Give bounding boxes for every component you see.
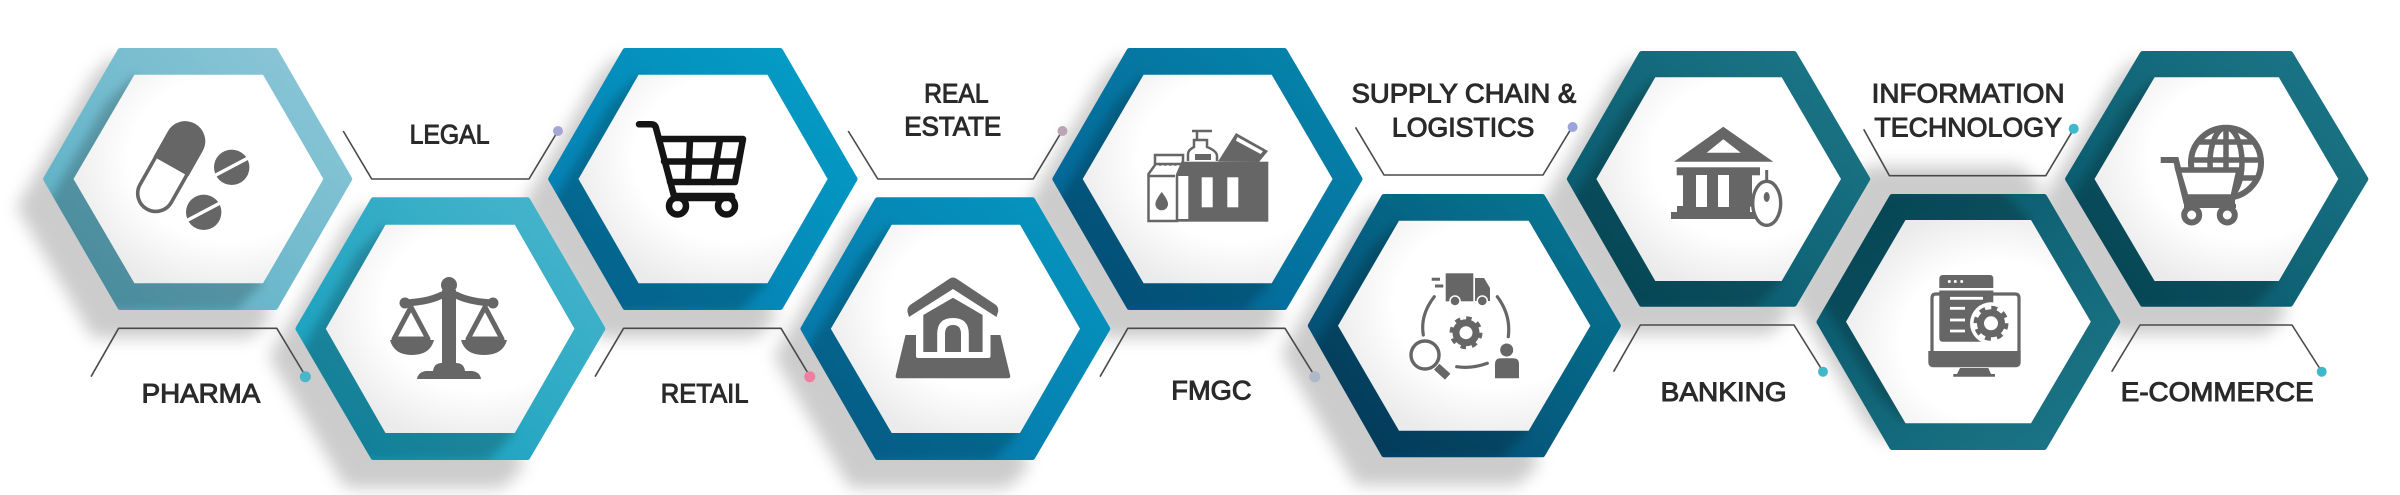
label: retail: RETAIL xyxy=(661,379,748,409)
label: e-commerce xyxy=(2112,325,2327,407)
label: supply chain and logistics xyxy=(1352,78,1578,175)
label: information technology xyxy=(1864,78,2079,176)
icon: capsule and tablets xyxy=(129,114,250,230)
hexagon: banking xyxy=(1568,54,1867,309)
icon: monitor with settings window xyxy=(1928,275,2021,377)
label: supply chain and logistics: SUPPLY CHAIN & xyxy=(1352,78,1576,108)
icon: scales of justice xyxy=(390,277,507,379)
hexagon: legal xyxy=(298,200,602,461)
label: real estate: REAL xyxy=(924,78,989,108)
label: fmgc xyxy=(1100,328,1320,405)
icon: logistics cycle xyxy=(1411,273,1519,378)
icon: cart with globe xyxy=(2161,128,2261,222)
hexagon: e-commerce xyxy=(2066,54,2365,309)
label: real estate xyxy=(848,78,1068,179)
label: information technology: INFORMATION xyxy=(1872,78,2065,108)
label: pharma: PHARMA xyxy=(142,379,260,409)
label: supply chain and logistics: LOGISTICS xyxy=(1392,113,1534,143)
hexagon: retail xyxy=(550,51,854,311)
label: fmgc: FMGC xyxy=(1171,375,1252,405)
hexagon: information technology xyxy=(1818,192,2117,447)
label: retail xyxy=(595,328,815,409)
label: information technology: TECHNOLOGY xyxy=(1874,113,2062,143)
label: legal xyxy=(343,119,563,179)
hexagon: supply chain and logistics xyxy=(1310,197,1618,459)
label: legal: LEGAL xyxy=(410,119,490,149)
hexagon: real estate xyxy=(803,200,1107,461)
icon: bank with mouse xyxy=(1671,127,1781,225)
label: banking: BANKING xyxy=(1661,377,1787,407)
label: banking xyxy=(1614,325,1828,407)
hexagon: pharma xyxy=(46,51,349,311)
icon: shopping cart xyxy=(639,124,743,214)
label: real estate: ESTATE xyxy=(904,111,1001,141)
label: pharma xyxy=(91,328,311,409)
icon: consumer goods box xyxy=(1148,131,1268,222)
label: e-commerce: E-COMMERCE xyxy=(2121,377,2314,407)
icon: house on plot xyxy=(896,278,1010,378)
hexagon: fmgc xyxy=(1055,51,1360,311)
